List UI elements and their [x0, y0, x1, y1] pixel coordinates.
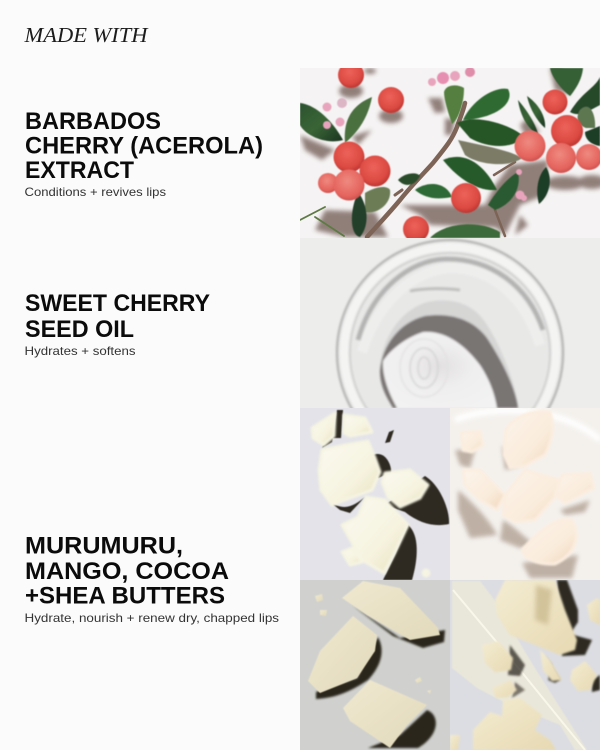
chunks	[450, 580, 600, 750]
shadows	[508, 580, 600, 698]
photo: murumuru butter	[300, 408, 450, 580]
flowers	[322, 67, 527, 201]
heading: Barbados cherry: EXTRACT	[25, 157, 134, 184]
description: sweet cherry: Hydrates + softens	[24, 344, 136, 358]
description: Barbados cherry: Conditions + revives lips	[24, 185, 166, 199]
cherries	[318, 62, 600, 242]
branch	[300, 103, 515, 237]
photo: shea butter with spatula	[450, 580, 600, 750]
shadows	[322, 410, 449, 580]
chunks	[461, 411, 594, 564]
shadows	[316, 606, 445, 748]
glass dish	[335, 238, 565, 408]
shadows	[455, 445, 590, 578]
heading: butters: MURUMURU,	[25, 532, 183, 560]
photo: cocoa butter	[300, 580, 450, 750]
plate edge	[455, 410, 600, 440]
title: MADE WITH	[23, 23, 149, 47]
heading: sweet cherry: SWEET CHERRY	[25, 290, 210, 317]
heading: butters: MANGO, COCOA	[25, 558, 229, 585]
heading: sweet cherry	[25, 290, 210, 343]
heading: butters: +SHEA BUTTERS	[25, 582, 225, 610]
chunks	[312, 413, 429, 576]
leaves	[300, 68, 600, 238]
text block: sweet cherry	[24, 290, 210, 358]
heading: butters	[25, 532, 229, 610]
text block: butters	[24, 532, 279, 625]
chunks	[308, 581, 440, 748]
heading: sweet cherry: SEED OIL	[25, 316, 134, 343]
photo: acerola branch	[300, 62, 600, 242]
oil pool	[380, 300, 518, 408]
shadows	[300, 68, 600, 237]
chunk hollow	[535, 585, 552, 625]
heading: Barbados cherry: CHERRY (ACEROLA)	[25, 132, 263, 160]
heading: Barbados cherry	[25, 108, 263, 184]
text block: Barbados cherry	[24, 108, 263, 199]
photo: oil in glass dish	[300, 238, 600, 408]
heading: Barbados cherry: BARBADOS	[25, 108, 161, 135]
spatula	[452, 581, 587, 750]
description: butters: Hydrate, nourish + renew dry, chapped lips	[24, 611, 279, 625]
photo: mango butter on plate	[450, 408, 600, 580]
